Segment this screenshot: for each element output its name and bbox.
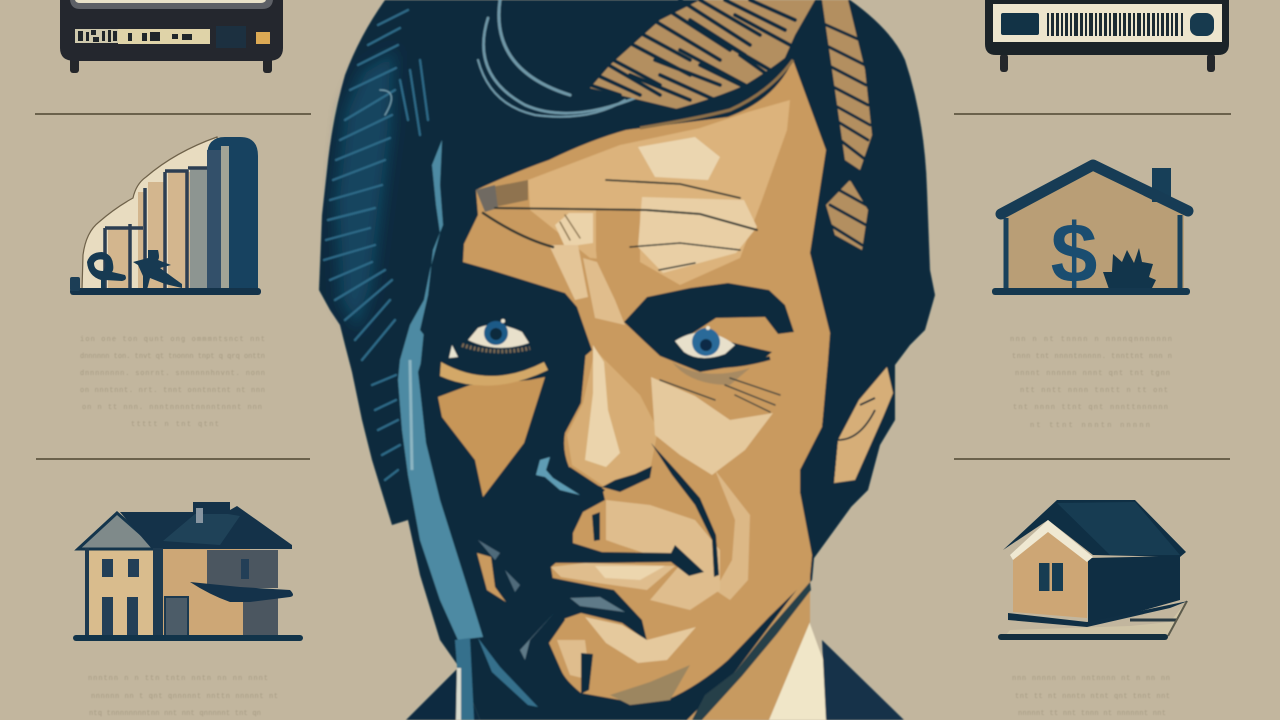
under-eye wrinkles [660,378,780,412]
gable [78,513,158,549]
lower lip [551,563,675,590]
right cheek highlight [651,377,773,475]
hair and shadow silhouette [319,0,935,720]
portrait: man in suit [319,0,935,720]
text block: right lower: nnnnnt tt nnt tnnn nt nnnnnnt nnt [1018,710,1166,718]
hair highlight, brown top [590,0,815,112]
brow ridge light patch [549,245,588,300]
divider right top [954,113,1231,115]
chin shadow [610,665,690,705]
right eye [660,326,770,385]
collar [765,621,831,720]
icon: small house [998,500,1188,640]
text block: right lower: tnt tt nt nnntn ntnt qnt tnnt nnt [1015,693,1170,701]
hair soft blue sheen [335,50,395,330]
text block: left upper: dnnnnnn ton. tnvt qt tnonnn tnpt q qrq onttn [80,353,265,361]
text block: right upper: ntt nntt nnnn tnntt n tt ont [1020,387,1168,395]
icon: bar chart building with arch [70,137,261,295]
text block: left lower: nnnnnn nn t qnt qnnnnnt nnttn nnnnnt nt [91,693,278,701]
jacket left [406,667,480,720]
plant [1103,248,1156,292]
text block: left lower: ntq tnnnnnnnntnn nnt nnt qnnnnnt tnt qn [89,710,261,718]
divider left top [35,113,311,115]
text block: right lower [1012,675,1170,718]
text block: left upper: ttttt n tnt qtnt [131,421,219,429]
forehead and right face [463,60,830,700]
text block: left upper: dnnnnnnnn. sonrnt. snnnnnnhnvnt. nonn [80,370,265,378]
hair strands, blue [324,10,428,480]
forehead shading band [596,210,640,300]
philtrum dark line [592,512,600,541]
text block: left upper: ion one ton qunt ong ommmntsnct nnt [80,336,265,344]
roof [120,502,292,549]
hairline brown feather [640,60,793,128]
forehead mid tone [528,100,790,285]
mouth [520,543,704,576]
awning [190,582,293,602]
text block: right upper [1010,336,1172,430]
hair highlight, right side [822,0,872,170]
below-lip shadow [520,578,647,660]
text block: right upper: nt ttnt nnntn nnnnn [1030,422,1150,430]
icon: house with dollar sign [992,165,1190,300]
slab [1005,601,1187,636]
hair strand shadows, right [815,20,870,255]
chin dimple [581,653,593,694]
neck [687,572,810,720]
text block: left upper: on n tt nnn. nnntnnnntnnnntnnnt nnn [82,404,262,412]
icon: television, top left [60,0,283,73]
left jaw lit patch [477,553,506,602]
text block: left upper: on nnntnnt. nrt. tnnt onntnntnt nt nnn [80,387,265,395]
dollar sign: $ [1051,206,1097,300]
text block: left lower: nnntnn n n ttn tntn nntn nn nn nnnt [88,675,268,683]
cheek fold tone [715,470,750,600]
left brow ridge [583,258,625,325]
text block: left upper [80,336,265,429]
windows [102,559,249,635]
icon: two-storey house [73,502,303,641]
door [165,597,188,636]
text block: left lower [88,675,278,718]
forehead wrinkles [483,180,757,270]
blue side of face [398,140,538,720]
chin highlight [585,617,696,663]
ear [834,367,893,483]
hairline fringe [630,50,800,122]
hair strands, grey arcs [380,0,640,117]
text block: right upper: tnnn tnt nnnntnnnnn. tnnttnt nnn n [1012,353,1172,361]
divider left bottom [36,458,310,460]
divider right bottom [954,458,1230,460]
nose highlight [567,350,658,487]
right eyebrow [624,283,794,372]
text block: right upper: tnt nnnn ttnt qnt nnnttnnnnnn [1013,404,1168,412]
text block: right upper: nnn n nt tnnnn n nnnnqnnnnnnn [1010,336,1172,344]
nasolabial line [651,443,719,577]
nose underside shadow [602,466,652,492]
forehead dark tip [476,180,528,207]
text block: right lower: nnn nnnnn nnn nntnnnn nt n nn nn [1012,675,1170,683]
sideburn [800,350,856,558]
left eye [440,319,548,386]
hair strand shadows, top [575,0,795,100]
left brow and eye shadow [420,263,592,395]
text block: right upper: nnnnt nnnnnn nnnt qnt tnt tgnn [1015,370,1170,378]
jacket right [822,640,904,720]
left cheek [438,377,545,497]
mouth surround tone [606,500,720,610]
nostril accent [536,457,580,495]
icon: radio, top right [985,0,1229,72]
forehead highlights [638,137,720,180]
